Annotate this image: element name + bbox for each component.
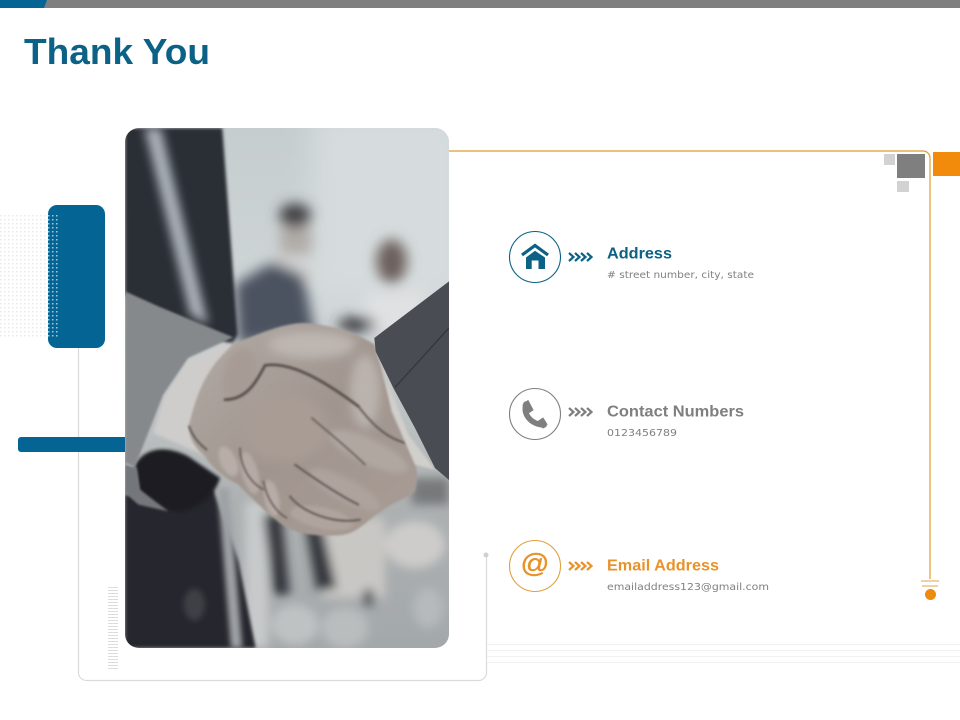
orange tab xyxy=(933,152,960,176)
title: Thank You xyxy=(24,31,210,72)
inner dark gap xyxy=(135,449,220,511)
arrows xyxy=(569,253,592,261)
orange frame terminal xyxy=(921,581,939,600)
left suit upper xyxy=(125,128,238,345)
contact: phone xyxy=(510,388,744,440)
icon: at sign xyxy=(510,540,560,592)
grey card outline xyxy=(78,340,487,681)
blue rounded block xyxy=(48,205,105,348)
icon: at sign: @ xyxy=(520,548,549,578)
left shirt strip xyxy=(144,128,208,325)
decorative squares xyxy=(884,154,925,192)
blurred man xyxy=(235,203,315,345)
right shirt cuff xyxy=(382,368,435,470)
lower background xyxy=(245,478,449,648)
hand xyxy=(189,323,417,536)
icon: house xyxy=(510,232,560,282)
arrows xyxy=(569,408,592,416)
dot pattern xyxy=(0,215,48,338)
grey outline end dot xyxy=(484,552,488,558)
detail: emailaddress123@gmail.com xyxy=(607,582,769,593)
top bar xyxy=(0,0,960,8)
orange frame line xyxy=(449,151,930,579)
icon: phone xyxy=(510,388,560,440)
tick marks xyxy=(108,587,118,670)
blue bar xyxy=(18,437,128,452)
detail: 0123456789 xyxy=(607,428,677,439)
heading: Email Address xyxy=(607,558,719,574)
detail: # street number, city, state xyxy=(607,270,754,281)
left shirt cuff xyxy=(153,341,233,456)
right sleeve xyxy=(374,281,449,480)
arrows xyxy=(569,562,592,570)
left suit lower xyxy=(125,490,256,648)
heading: Address xyxy=(607,246,672,262)
left sleeve xyxy=(125,291,233,466)
hand highlights xyxy=(214,331,413,535)
hand shading xyxy=(189,365,405,521)
blurred woman xyxy=(337,239,425,335)
photo: handshake xyxy=(125,111,468,648)
stripes bottom right xyxy=(487,644,960,662)
heading: Contact Numbers xyxy=(607,404,744,420)
contact: email xyxy=(510,540,769,593)
contact: address xyxy=(510,232,754,282)
